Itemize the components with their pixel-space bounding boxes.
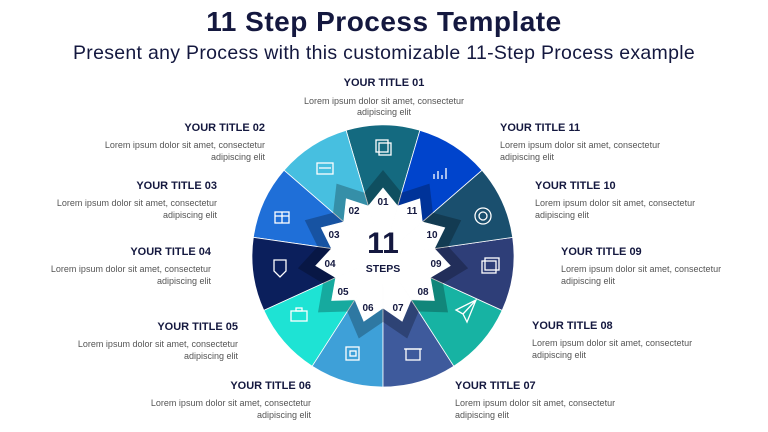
- step numbers: 07: [392, 303, 404, 314]
- text 04: adipiscing elit: [157, 276, 211, 286]
- text 01: Lorem ipsum dolor sit amet, consectetur: [304, 96, 464, 106]
- text 03: [57, 180, 217, 220]
- sector 04: [248, 219, 388, 311]
- center label: [366, 227, 400, 275]
- text 07: adipiscing elit: [455, 410, 510, 420]
- title: 11 Step Process Template: [206, 6, 562, 37]
- icon 02 keyboard: [317, 163, 333, 174]
- text 04: [51, 246, 212, 286]
- center label: 11: [367, 227, 399, 260]
- icons: [274, 140, 499, 360]
- center label: STEPS: [366, 263, 400, 275]
- text 02: [105, 122, 265, 162]
- text 01: YOUR TITLE 01: [344, 77, 424, 89]
- text 07: YOUR TITLE 07: [455, 380, 536, 392]
- text 08: [532, 320, 692, 360]
- sector 05: [260, 228, 407, 370]
- text 11: YOUR TITLE 11: [500, 122, 580, 134]
- icon 06 news: [346, 347, 359, 360]
- sector 11: [352, 126, 485, 276]
- text 09: [561, 246, 721, 286]
- text 06: adipiscing elit: [257, 410, 311, 420]
- text 03: YOUR TITLE 03: [136, 180, 217, 192]
- text 01: adipiscing elit: [357, 107, 412, 117]
- text 06: Lorem ipsum dolor sit amet, consectetur: [151, 398, 311, 408]
- icon 09 pictures: [482, 258, 499, 273]
- step numbers: [324, 197, 442, 314]
- icon 05 toolbox: [291, 308, 307, 321]
- text 10: Lorem ipsum dolor sit amet, consectetur: [535, 198, 695, 208]
- icon 04 shield: [274, 260, 286, 277]
- text 02: YOUR TITLE 02: [184, 122, 265, 134]
- sector 06: [311, 246, 418, 392]
- step numbers: 08: [417, 287, 429, 298]
- text 08: adipiscing elit: [532, 350, 587, 360]
- sector 02: [281, 126, 414, 276]
- subtitle: Present any Process with this customizable 11-Step Process example: [73, 42, 695, 64]
- text 05: YOUR TITLE 05: [157, 321, 238, 333]
- icon 10 lifebuoy: [475, 208, 491, 224]
- text 06: [151, 380, 311, 420]
- text 11: adipiscing elit: [500, 152, 555, 162]
- text 09: YOUR TITLE 09: [561, 246, 642, 258]
- sector 08: [359, 228, 506, 370]
- sector 09: [378, 219, 518, 311]
- text 04: Lorem ipsum dolor sit amet, consectetur: [51, 264, 211, 274]
- text 05: Lorem ipsum dolor sit amet, consectetur: [78, 339, 238, 349]
- text 05: [78, 321, 238, 361]
- sector 03: [249, 168, 398, 290]
- dark inner star band: [295, 170, 471, 344]
- text 10: YOUR TITLE 10: [535, 180, 616, 192]
- sector 01: [346, 125, 420, 256]
- step numbers: 05: [337, 287, 349, 298]
- icon 11 chart: [434, 168, 446, 179]
- wheel: [248, 125, 518, 392]
- white center star: [314, 188, 452, 325]
- step numbers: 02: [348, 206, 360, 217]
- step numbers: 09: [430, 259, 442, 270]
- text 10: [535, 180, 695, 220]
- text 01: [304, 77, 464, 117]
- icon 01 frames: [376, 140, 391, 155]
- text 03: Lorem ipsum dolor sit amet, consectetur: [57, 198, 217, 208]
- text 02: Lorem ipsum dolor sit amet, consectetur: [105, 140, 265, 150]
- text 04: YOUR TITLE 04: [130, 246, 212, 258]
- text 02: adipiscing elit: [211, 152, 265, 162]
- text 09: adipiscing elit: [561, 276, 616, 286]
- text 05: adipiscing elit: [184, 351, 238, 361]
- text 10: adipiscing elit: [535, 210, 590, 220]
- step numbers: 04: [324, 259, 336, 270]
- text 11: [500, 122, 660, 162]
- icon 03 gift: [275, 212, 289, 223]
- sector 07: [348, 246, 455, 392]
- text 03: adipiscing elit: [163, 210, 217, 220]
- text 08: YOUR TITLE 08: [532, 320, 613, 332]
- icon 07 box: [404, 349, 422, 360]
- text 11: Lorem ipsum dolor sit amet, consectetur: [500, 140, 660, 150]
- icon 08 plane: [456, 300, 476, 322]
- step numbers: 10: [426, 230, 438, 241]
- step numbers: 11: [407, 206, 418, 217]
- text 07: Lorem ipsum dolor sit amet, consectetur: [455, 398, 615, 408]
- text 09: Lorem ipsum dolor sit amet, consectetur: [561, 264, 721, 274]
- step numbers: 03: [328, 230, 340, 241]
- text 07: [455, 380, 615, 420]
- text 06: YOUR TITLE 06: [230, 380, 311, 392]
- text 08: Lorem ipsum dolor sit amet, consectetur: [532, 338, 692, 348]
- step numbers: 01: [377, 197, 389, 208]
- step numbers: 06: [362, 303, 374, 314]
- sector 10: [368, 168, 517, 290]
